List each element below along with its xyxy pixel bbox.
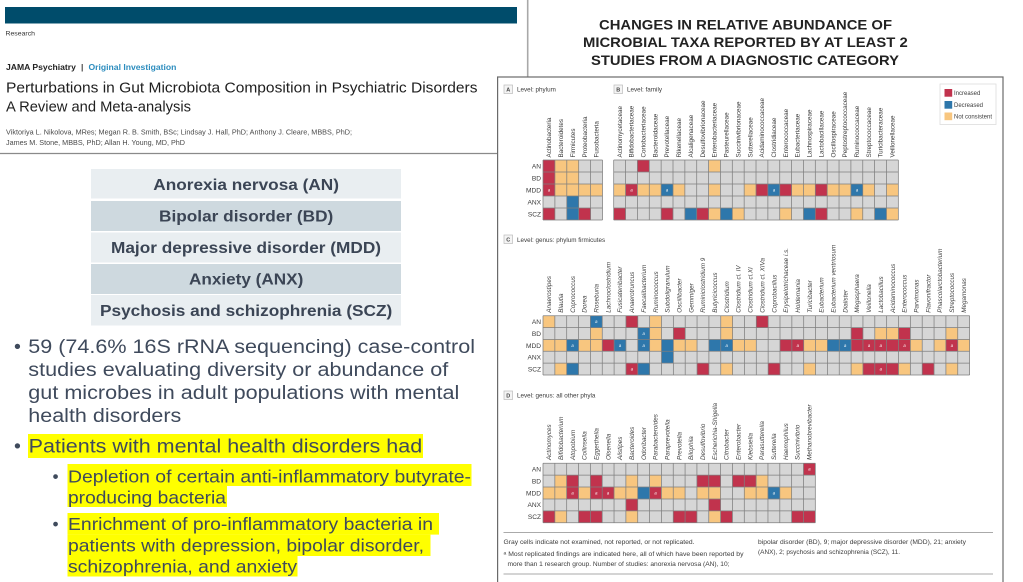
panel D taxa labels: Bifidobacterium [558,417,565,460]
panel B taxa labels: Enterobacteriaceae [712,102,719,158]
panel D taxa labels: Methanobrevibacter [807,403,814,460]
panel B taxa labels: Streptococcaceae [866,107,873,158]
panel D taxa labels: Prevotella [676,432,683,460]
panel C taxa labels: Dorea [582,295,589,313]
panel B replicated markers [630,187,859,192]
bullet: patients highlight: Patients with mental health disorders had [29,436,422,458]
panel B cells [614,160,898,220]
panel D replicated markers: a [595,490,598,495]
panel A header: A [506,87,510,93]
sub-bullet: depletion: Depletion of certain anti-inflammatory butyrate- [68,467,471,487]
panel B taxa labels: Acidaminococcaceae [759,97,766,158]
panel D replicated markers [571,467,811,495]
panel C taxa labels: Dialister [842,289,849,313]
panel C replicated markers: a [880,366,883,372]
heading: figure title: CHANGES IN RELATIVE ABUNDANCE OF [599,16,892,32]
panel C taxa labels: Acidaminococcus [890,263,897,314]
panel C taxa labels: Eubacterium [819,277,826,313]
panel C taxa labels: Butyricicoccus [712,272,719,313]
legend: decreased: Decreased [954,103,983,109]
bullet: patients highlight: • [14,436,21,458]
panel C taxa labels [546,245,968,314]
panel D row labels: BD [532,478,541,486]
panel A row labels: MDD [526,188,541,194]
panel C taxa labels: Faecalibacterium [641,265,648,313]
panel C taxa labels: Enterococcus [902,274,909,313]
panel C taxa labels: Phascolarctobacterium [937,249,944,313]
table: diagnostic categories: Anorexia nervosa (AN) [153,177,339,194]
panel D taxa labels: Odoribacter [641,426,648,460]
panel C taxa labels: Parvimonas [914,279,920,313]
panel C taxa labels: Erysipelotrichaceae i.s. [783,248,790,313]
panel C header: Level: genus: phylum firmicutes [517,237,605,244]
panel C replicated markers: a [844,343,847,348]
panel D taxa labels: Alistipes [617,436,624,461]
panel C taxa labels: Oscillibacter [676,278,684,313]
panel B taxa labels: Alcaligenaceae [688,114,695,158]
panel B taxa labels: Veillonellaceae [890,115,897,158]
panel C row labels: ANX [527,355,542,362]
panel D taxa labels [546,402,814,461]
panel D taxa labels: Sutterella [771,433,778,460]
panel C header [504,235,605,244]
panel A: phylum heatmap [504,85,602,220]
figure footnote: Most replicated findings are indicated here, all of which have been reported by [506,552,744,558]
panel B replicated markers: a [630,187,633,192]
panel D replicated markers: a [773,490,776,495]
panel D replicated markers: a [654,490,657,495]
authors: Viktoriya L. Nikolova, MRes; Megan R. B. Smith, BSc; Lindsay J. Hall, PhD; Anthony J. Cleare, MBBS, PhD; [6,127,352,136]
panel D taxa labels: Eggerthella [594,428,600,460]
legend [940,84,996,124]
panel C replicated markers: a [643,331,646,336]
panel B taxa labels: Clostridiaceae [771,117,778,158]
panel C replicated markers: a [643,343,646,348]
panel C row labels [526,319,542,374]
table: diagnostic categories [91,169,401,326]
panel C taxa labels: Subdoligranulum [665,265,672,313]
panel A taxa labels: Fusobacteria [594,121,601,158]
panel C taxa labels: Flavonifractor [925,274,932,313]
panel D taxa labels: Escherichia-Shigella [712,402,719,460]
panel C row labels: BD [532,331,541,338]
panel D taxa labels: Parasutterella [759,421,766,460]
panel B taxa labels: Coriobacteriaceae [641,106,648,158]
panel D taxa labels: Klebsiella [747,433,754,460]
panel D taxa labels: Collinsella [582,431,589,460]
panel B taxa labels: Eubacteriaceae [795,113,802,158]
panel C taxa labels: Veillonella [866,284,873,313]
panel B replicated markers: a [856,187,859,192]
panel C taxa labels: Blautia [558,293,565,313]
panel D replicated markers: a [808,467,811,472]
figure content [504,84,996,574]
panel B header: B [616,87,620,93]
panel A row labels [526,164,542,218]
journal banner bar [5,7,517,24]
panel C taxa labels: Anaerostipes [546,275,553,314]
panel C replicated markers: a [903,343,906,348]
panel A header: Level: phylum [517,86,556,94]
panel A row labels: AN [532,164,541,170]
panel B: family heatmap [614,85,898,220]
bullet: study summary: gut microbes in adult populations with mental [28,382,459,404]
panel B replicated markers: a [773,187,776,192]
heading: figure title: MICROBIAL TAXA REPORTED BY AT LEAST 2 [583,34,908,50]
sub-bullet: enrichment: patients with depression, bipolar disorder, [68,536,424,556]
table: diagnostic categories: Bipolar disorder (BD) [159,208,333,225]
panel C taxa labels: Turicibacter [807,279,814,313]
panel C replicated markers: a [880,343,883,348]
panel D replicated markers: a [571,490,574,495]
panel D header: D [506,393,510,399]
bullet: study summary: 59 (74.6% 16S rRNA sequencing) case-control [28,336,475,358]
figure footnote [504,532,993,574]
panel B taxa labels: Oscillospiraceae [830,111,837,158]
sub-bullet: enrichment: Enrichment of pro-inflammatory bacteria in [68,514,433,534]
sub-bullet: depletion [52,464,472,507]
panel C taxa labels: Streptococcus [949,272,956,313]
panel D: genus other phyla heatmap [504,391,815,523]
panel D taxa labels: Atopobium [570,430,577,461]
bullet: study summary: studies evaluating diversity or abundance of [28,359,449,381]
panel D taxa labels: Bacteroides [629,426,636,460]
panel D header: Level: genus: all other phyla [517,392,596,400]
panel B taxa labels: Lactobacillaceae [818,110,825,158]
table: diagnostic categories: Psychosis and schizophrenia (SCZ) [100,303,392,320]
panel A row labels: BD [532,176,541,182]
heading: figure title: STUDIES FROM A DIAGNOSTIC CATEGORY [591,52,900,68]
legend: increased: Increased [954,91,980,97]
panel B taxa labels: Sutterellaceae [747,117,754,158]
panel A replicated markers: a [548,187,551,192]
authors [6,127,352,147]
panel A taxa labels: Actinobacteria [546,117,553,158]
journal line: Original Investigation [88,62,176,72]
panel C replicated markers: a [595,319,598,324]
panel C taxa labels: Clostridium cl. IV [736,265,743,313]
panel C header: C [506,237,510,243]
sub-bullet: enrichment: • [52,514,59,534]
panel D taxa labels: Succinivibrio [795,424,802,460]
panel C taxa labels: Fusicatenibacter [617,266,624,313]
panel A row labels: ANX [527,200,542,206]
article title: Perturbations in Gut Microbiota Composition in Psychiatric Disorders [6,80,478,97]
panel C taxa labels: Megamonas [961,277,968,313]
panel C: genus firmicutes heatmap [504,235,970,375]
panel C cells [543,316,970,375]
panel B taxa labels: Enterococcaceae [783,108,790,158]
panel C taxa labels: Clostridium cl.XI [748,267,755,313]
panel D taxa labels: Citrobacter [724,428,731,460]
panel C replicated markers: a [631,366,634,372]
panel B taxa labels: Succinivibrionaceae [735,101,742,158]
panel C replicated markers: a [868,343,871,348]
panel B taxa labels: Prevotellaceae [664,115,671,158]
panel D row labels: MDD [526,490,541,497]
panel C row labels: MDD [526,343,541,350]
legend: not consistent: Not consistent [954,114,992,120]
panel D taxa labels: Desulfovibrio [700,423,707,460]
panel D row labels: AN [532,467,541,474]
panel C replicated markers [571,319,954,372]
panel B taxa labels: Rikenellaceae [676,117,683,158]
panel: article header [5,7,517,147]
panel C replicated markers: a [571,343,574,348]
bullet: study summary: • [14,336,21,358]
article subtitle: A Review and Meta-analysis [6,99,191,116]
panel C replicated markers: a [951,343,954,348]
bullet: study summary [14,336,475,427]
panel B header [614,85,663,94]
panel C taxa labels: Ruminiclostridium 9 [700,257,707,313]
panel B taxa labels: Bifidobacteriaceae [629,105,636,158]
journal line: | [81,62,83,72]
panel C taxa labels: Gemmiger [688,282,695,313]
panel B taxa labels: Lachnospiraceae [807,109,814,158]
panel B header: Level: family [627,86,663,94]
authors: James M. Stone, MBBS, PhD; Allan H. Young, MD, PhD [6,138,185,147]
panel C taxa labels: Clostridium cl. XIVa [759,257,766,313]
figure footnote: more than 1 research group. Number of studies: anorexia nervosa (AN), 10; [508,562,730,568]
panel C taxa labels: Lachnoclostridium [605,262,612,313]
panel B taxa labels: Peptostreptococcaceae [842,91,849,158]
heading: figure title [583,16,908,68]
figure footnote: Gray cells indicate not examined, not reported, or not replicated. [504,540,695,546]
panel D row labels: SCZ [528,514,541,521]
panel C taxa labels: Lactobacillus [878,275,885,313]
panel C taxa labels: Holdemania [795,279,802,313]
panel C taxa labels: Roseburia [594,284,600,313]
panel B taxa labels: Turicibacteraceae [878,107,885,158]
sub-bullet: enrichment: schizophrenia, and anxiety [68,557,297,577]
panel A taxa labels: Proteobacteria [582,116,589,158]
panel C replicated markers: a [797,343,800,348]
panel C taxa labels: Anaerotruncus [629,271,636,314]
figure footnote: bipolar disorder (BD), 9; major depressive disorder (MDD), 21; anxiety [758,540,966,546]
panel B replicated markers: a [666,187,669,192]
panel B taxa labels [617,91,897,158]
panel B taxa labels: Bacteroidaceae [652,113,659,158]
panel A cells [543,160,602,220]
table: diagnostic categories: Major depressive disorder (MDD) [111,240,381,257]
panel D replicated markers: a [607,490,610,495]
panel B taxa labels: Desulfovibrionaceae [700,100,707,158]
panel D taxa labels: Enterobacter [736,423,742,460]
panel C replicated markers: a [619,343,622,348]
sub-bullet: enrichment [52,513,439,577]
panel B taxa labels: Ruminococcaceae [854,105,861,158]
panel D taxa labels: Bilophila [688,436,695,460]
panel C row labels: AN [532,319,541,326]
panel D row labels: ANX [527,502,542,509]
panel D cells [543,463,815,523]
sub-bullet: depletion: producing bacteria [68,487,226,507]
panel C taxa labels: Coprococcus [570,275,577,313]
panel D taxa labels: Olsenella [605,433,612,460]
panel D taxa labels: Haemophilus [783,422,790,460]
figure footnote: a [504,551,507,556]
section label: Research [6,30,36,38]
panel C replicated markers: a [726,343,729,348]
panel C row labels: SCZ [528,367,541,374]
panel A taxa labels: Bacteroidetes [558,119,565,158]
panel C taxa labels: Ruminococcus [653,271,660,313]
panel: figure frame [498,77,1003,582]
journal line: JAMA Psychiatry [6,62,76,72]
panel A taxa labels: Firmicutes [570,128,577,158]
table: diagnostic categories: Anxiety (ANX) [189,271,303,288]
panel B taxa labels: Actinomycetaceae [617,106,624,158]
panel D row labels [526,467,542,521]
panel C taxa labels: Megasphaera [854,274,861,313]
figure footnote: (ANX), 2; psychosis and schizophrenia (SCZ), 11. [758,550,900,556]
panel C taxa labels: Clostridium [724,281,731,313]
panel C taxa labels: Eubacterium ventriosum [830,245,838,313]
bullet: study summary: health disorders [28,405,182,427]
panel D taxa labels: Parabacteroides [653,413,660,460]
panel B taxa labels: Pasteurellaceae [724,112,731,158]
panel A row labels: SCZ [528,212,541,218]
panel A header [504,85,556,94]
panel D taxa labels: Paraprevotella [664,419,672,460]
panel C taxa labels: Coprobacillus [771,274,778,313]
sub-bullet: depletion: • [52,467,59,487]
panel D taxa labels: Actinomyces [546,423,553,461]
panel A taxa labels [546,116,601,158]
